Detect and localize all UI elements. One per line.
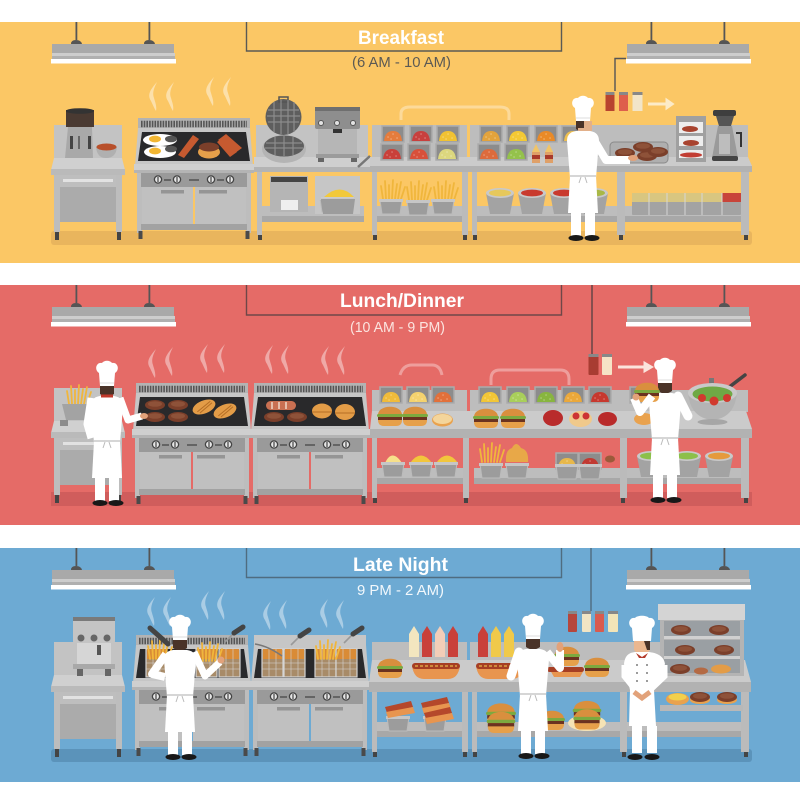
subtitle: lunch hours: (10 AM - 9 PM) [350, 320, 445, 336]
arrow [618, 364, 651, 370]
lower shelf food bins [381, 443, 733, 479]
fryer two with baskets [250, 628, 370, 756]
hanging sauce bottles [568, 548, 618, 632]
title: lunch and dinner: Lunch/Dinner [340, 291, 465, 312]
steam over grills [148, 344, 345, 378]
coffee pot [712, 110, 741, 161]
panel: breakfast [0, 22, 800, 263]
hanging sauce bottles [606, 58, 642, 111]
grill two with patties and buns [250, 383, 370, 504]
title: late night: Late Night [353, 555, 449, 576]
food warmer cabinet [658, 604, 745, 676]
ceiling lamp left [51, 285, 176, 326]
title: breakfast: Breakfast [358, 28, 445, 49]
food warmer [676, 116, 706, 162]
food pans [380, 387, 652, 403]
chef: fryer [152, 615, 224, 760]
ceiling lamp right [626, 548, 751, 590]
ceiling lamp right [626, 22, 751, 64]
lower shelf food bins [379, 180, 741, 215]
arrow [648, 100, 672, 108]
coffee station [51, 108, 125, 240]
lower shelf hot dogs and burgers [385, 697, 606, 733]
burgers and toppings on counter [377, 407, 654, 428]
hot dogs and burgers on counter [377, 647, 610, 679]
food pans [381, 126, 584, 163]
subtitle: breakfast hours: (6 AM - 10 AM) [352, 55, 451, 71]
tray of patties [610, 142, 668, 163]
panel: late night [0, 548, 800, 782]
griddle with breakfast food [134, 118, 254, 239]
fryer one with baskets [132, 627, 252, 756]
grill one with patties and buns [132, 383, 252, 504]
prep counter [369, 642, 751, 757]
steam over fryers [147, 591, 344, 630]
salad bowl [688, 375, 745, 425]
chef: front-facing [624, 616, 665, 760]
waffle iron [262, 97, 306, 163]
warmer lower shelf food [660, 692, 743, 711]
prep counter [370, 125, 752, 240]
squeeze bottles [409, 626, 514, 657]
prep counter [370, 390, 752, 503]
ceiling lamp right [626, 285, 751, 326]
ceiling lamp left [51, 22, 176, 64]
chef: fry and grill [88, 361, 148, 506]
panel: lunch and dinner [0, 285, 800, 525]
hanging sauce bottles [588, 285, 612, 375]
chef: burger assembly [632, 358, 688, 503]
espresso station [51, 617, 125, 757]
subtitle: late night hours: 9 PM - 2 AM) [357, 583, 444, 599]
sneeze guards [400, 365, 569, 385]
steam over griddle [149, 77, 231, 111]
chef: breakfast [567, 96, 638, 241]
ceiling lamp left [51, 548, 176, 590]
espresso machine [315, 107, 370, 167]
chef: line cook [511, 614, 564, 759]
fry station [51, 385, 125, 503]
sneeze guard [401, 107, 509, 120]
waffle station counter and shelf [254, 125, 372, 240]
